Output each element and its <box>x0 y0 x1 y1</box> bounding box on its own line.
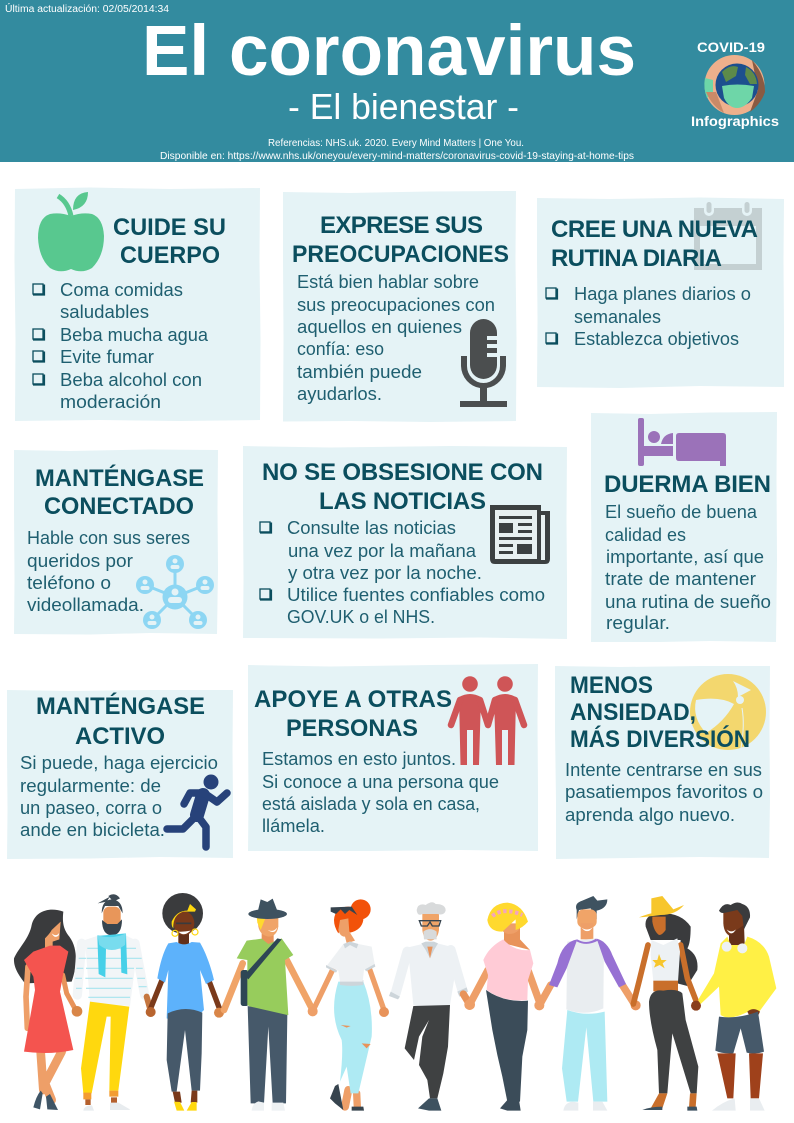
checklist: Beba mucha agua <box>60 325 209 345</box>
panel: cree una nueva rutina diaria <box>537 198 784 388</box>
body text <box>27 528 190 615</box>
person 3: woman with afro <box>146 893 224 1111</box>
heading: MÁS DIVERSIÓN <box>570 725 750 753</box>
body text: ayudarlos. <box>297 384 382 404</box>
illustration: people holding hands <box>14 893 776 1111</box>
body text: ande en bicicleta. <box>20 820 165 840</box>
checklist: moderación <box>60 392 161 412</box>
right five people <box>389 896 776 1111</box>
panel: menos ansiedad, más diversión <box>555 666 770 859</box>
person 4: man with hat and green shirt <box>224 899 318 1111</box>
body text <box>605 502 771 633</box>
body text: importante, así que <box>606 547 764 567</box>
heading <box>551 216 758 272</box>
checklist <box>33 280 209 412</box>
heading <box>254 686 452 742</box>
checklist: Establezca objetivos <box>574 329 739 349</box>
person 9: woman in yellow hat <box>633 896 701 1111</box>
heading <box>36 692 205 750</box>
checklist: semanales <box>574 307 661 327</box>
references <box>160 137 634 162</box>
heading <box>570 672 750 753</box>
covid-19 infographics logo: COVID-19 <box>697 39 765 55</box>
heading <box>292 212 509 268</box>
body text: regularmente: de <box>20 776 161 796</box>
body text: sus preocupaciones con <box>297 295 495 315</box>
body text: también puede <box>297 362 422 382</box>
body text: queridos por <box>27 551 133 571</box>
icon: microphone <box>460 319 507 407</box>
references: Referencias: NHS.uk. 2020. Every Mind Matters | One You. <box>268 137 524 149</box>
panel: manténgase conectado <box>14 450 218 634</box>
icon: people holding hands <box>451 676 524 765</box>
heading: ANSIEDAD, <box>570 699 696 726</box>
body text: trate de mantener <box>605 569 756 589</box>
heading <box>113 214 226 269</box>
checklist <box>546 284 751 349</box>
subtitle: - El bienestar - <box>288 86 519 127</box>
heading: CUERPO <box>120 242 220 269</box>
checklist: saludables <box>60 302 149 322</box>
icon: bed <box>638 418 726 466</box>
heading: CUIDE SU <box>113 214 226 241</box>
person 7: blonde woman in pink <box>464 903 544 1111</box>
body text: aprenda algo nuevo. <box>565 805 735 825</box>
references: Disponible en: https://www.nhs.uk/oneyou/every-mind-matters/coronavirus-covid-19-staying-at-home-tips <box>160 150 634 162</box>
checklist: Utilice fuentes confiables como <box>287 585 545 605</box>
title: El coronavirus <box>142 12 636 91</box>
covid-19 infographics logo <box>691 39 779 129</box>
person 8: man in raglan shirt <box>539 896 641 1111</box>
body text: Hable con sus seres <box>27 528 190 548</box>
checklist: GOV.UK o el NHS. <box>287 607 435 627</box>
body text: Está bien hablar sobre <box>297 272 479 292</box>
covid-19 infographics logo: Infographics <box>691 113 779 129</box>
heading <box>35 464 204 520</box>
heading: CREE UNA NUEVA <box>551 216 758 243</box>
body text: Intente centrarse en sus <box>565 760 762 780</box>
heading: DUERMA BIEN <box>604 471 771 498</box>
checklist: Consulte las noticias <box>287 518 456 538</box>
person 1: woman in red dress <box>14 910 82 1110</box>
heading: EXPRESE SUS <box>320 212 483 239</box>
heading: CONECTADO <box>44 493 194 520</box>
heading: MANTÉNGASE <box>36 692 205 720</box>
heading: RUTINA DIARIA <box>551 245 722 272</box>
panel: manténgase activo <box>7 690 233 859</box>
left five people <box>14 893 389 1111</box>
heading: MANTÉNGASE <box>35 464 204 492</box>
icon: apple <box>38 192 104 271</box>
heading: MENOS <box>570 672 653 699</box>
icon: network <box>136 555 214 629</box>
body text: El sueño de buena <box>605 502 758 522</box>
icon: calendar <box>694 200 762 270</box>
heading: PERSONAS <box>286 715 418 742</box>
body text: calidad es <box>605 525 686 545</box>
panel: apoye a otras personas <box>248 664 538 851</box>
checklist: Haga planes diarios o <box>574 284 751 304</box>
body text <box>565 760 763 825</box>
body text: una rutina de sueño <box>605 592 771 612</box>
person 5: red-haired woman <box>313 899 389 1111</box>
checklist: y otra vez por la noche. <box>288 563 482 583</box>
body text <box>20 753 218 840</box>
body text: un paseo, corra o <box>20 798 162 818</box>
heading: ACTIVO <box>75 723 165 750</box>
checklist <box>260 518 545 627</box>
checklist: una vez por la mañana <box>288 541 477 561</box>
person 10: man in yellow sweater <box>698 903 776 1111</box>
person 6: older man with glasses <box>389 902 470 1111</box>
heading: PREOCUPACIONES <box>292 241 509 268</box>
heading <box>262 459 543 515</box>
body text <box>262 749 499 836</box>
body text: regular. <box>606 613 670 633</box>
icon: beach ball <box>690 674 766 750</box>
heading: LAS NOTICIAS <box>319 488 486 515</box>
body text: confía: eso <box>297 339 384 359</box>
body text: Estamos en esto juntos. <box>262 749 456 769</box>
body text: pasatiempos favoritos o <box>565 782 763 802</box>
icon: newspaper <box>490 505 550 564</box>
body text: Si conoce a una persona que <box>262 772 499 792</box>
panel: no se obsesione con las noticias <box>243 446 567 639</box>
header banner <box>0 0 794 162</box>
icon: runner <box>167 774 227 847</box>
body text: llámela. <box>262 816 325 836</box>
panel: cuide su cuerpo <box>14 188 260 421</box>
heading: NO SE OBSESIONE CON <box>262 459 543 486</box>
body text: está aislada y sola en casa, <box>262 794 480 814</box>
checklist: Coma comidas <box>60 280 183 300</box>
body text: aquellos en quienes <box>297 317 462 337</box>
last updated: Última actualización: 02/05/2014:34 <box>5 2 169 15</box>
panel: exprese sus preocupaciones <box>283 191 516 422</box>
checklist: Evite fumar <box>60 347 154 367</box>
body text: videollamada. <box>27 595 144 615</box>
panel: duerma bien <box>591 412 777 642</box>
body text: Si puede, haga ejercicio <box>20 753 218 773</box>
body text: teléfono o <box>27 573 111 593</box>
body text <box>297 272 495 404</box>
heading: APOYE A OTRAS <box>254 686 452 713</box>
person 2: bearded man with scarf <box>75 894 150 1111</box>
checklist: Beba alcohol con <box>60 370 202 390</box>
